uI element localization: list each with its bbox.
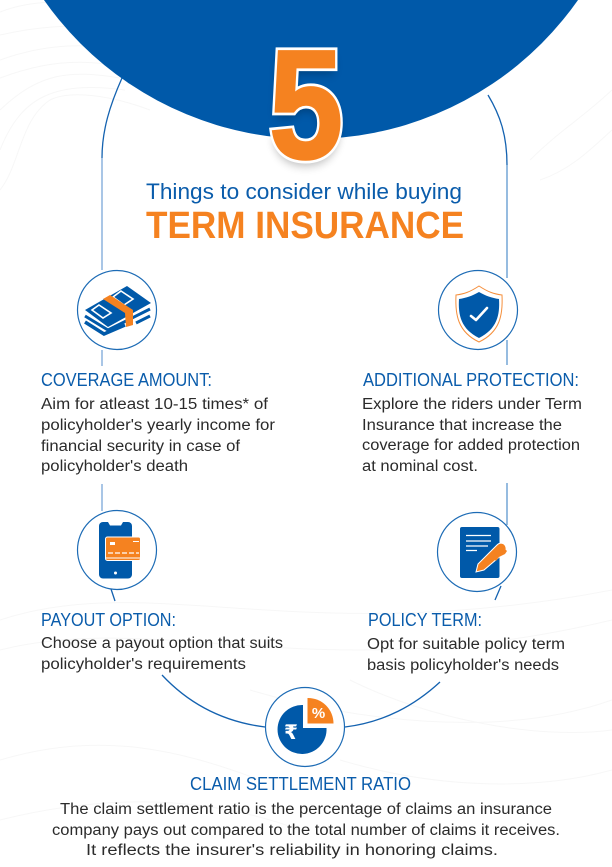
body text: coverage for added protection bbox=[362, 437, 580, 454]
body text: policyholder's death bbox=[41, 458, 188, 475]
body text bbox=[41, 635, 283, 673]
panel: policy term bbox=[367, 512, 565, 674]
title: TERM INSURANCE bbox=[146, 205, 464, 247]
heading: PAYOUT OPTION: bbox=[41, 609, 176, 630]
body text bbox=[52, 801, 560, 859]
big number 5: 5 bbox=[269, 24, 343, 197]
icon: pie chart with rupee bbox=[266, 688, 344, 766]
heading: ADDITIONAL PROTECTION: bbox=[363, 369, 579, 390]
body text: financial security in case of bbox=[41, 438, 241, 455]
body text: Aim for atleast 10-15 times* of bbox=[41, 396, 269, 413]
body text bbox=[41, 396, 275, 475]
icon: phone with card bbox=[78, 510, 156, 590]
body text bbox=[362, 396, 582, 475]
body text: It reflects the insurer's reliability in honoring claims. bbox=[86, 842, 498, 859]
blue header arc bbox=[0, 0, 612, 139]
big number 5: 5 bbox=[269, 18, 343, 191]
big number 5: 5 bbox=[269, 18, 343, 191]
heading: COVERAGE AMOUNT: bbox=[41, 369, 212, 390]
body text bbox=[367, 636, 565, 674]
subtitle: Things to consider while buying bbox=[146, 179, 462, 204]
icon: money stack bbox=[78, 270, 156, 350]
body text: policyholder's yearly income for bbox=[41, 417, 275, 434]
icon: pie chart with rupee: ₹ bbox=[284, 720, 298, 744]
body text: Insurance that increase the bbox=[362, 417, 562, 434]
body text: policyholder's requirements bbox=[41, 656, 246, 673]
panel: additional protection bbox=[362, 270, 582, 475]
panel: coverage amount bbox=[41, 270, 275, 475]
heading: POLICY TERM: bbox=[368, 609, 482, 630]
body text: company pays out compared to the total number of claims it receives. bbox=[52, 822, 560, 839]
icon: pie chart with rupee: % bbox=[312, 705, 325, 722]
icon: document with pen bbox=[438, 512, 516, 592]
body text: Choose a payout option that suits bbox=[41, 635, 283, 652]
body text: basis policyholder's needs bbox=[367, 657, 559, 674]
body text: at nominal cost. bbox=[362, 458, 478, 475]
icon: shield bbox=[438, 270, 518, 350]
panel: payout option bbox=[41, 510, 283, 673]
body text: The claim settlement ratio is the percentage of claims an insurance bbox=[60, 801, 552, 818]
panel: claim settlement ratio bbox=[52, 688, 560, 859]
body text: Explore the riders under Term bbox=[362, 396, 582, 413]
connector lines bbox=[102, 78, 507, 727]
body text: Opt for suitable policy term bbox=[367, 636, 565, 653]
heading: CLAIM SETTLEMENT RATIO bbox=[190, 773, 411, 794]
